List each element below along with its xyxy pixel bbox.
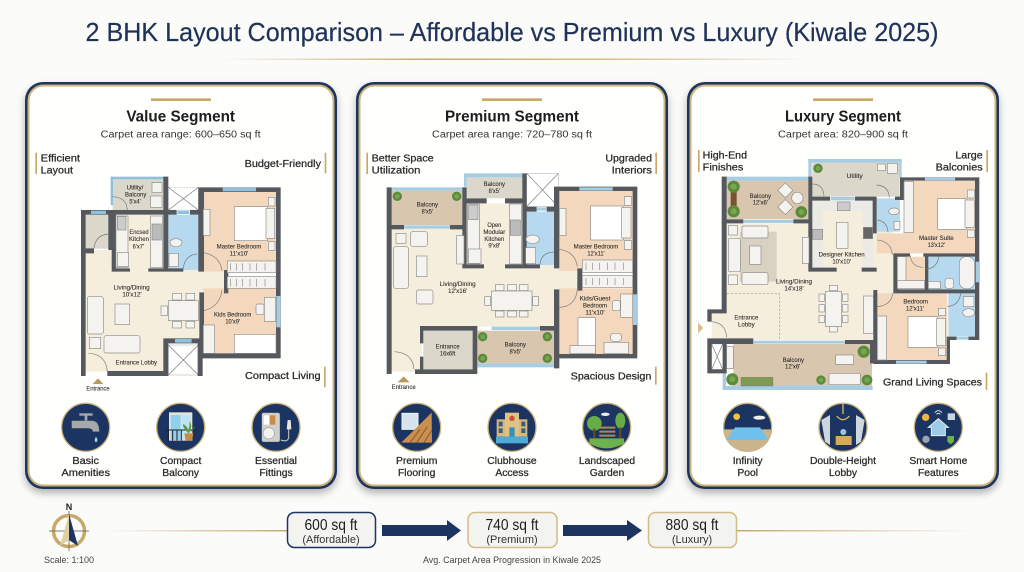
entrance marker: Entrance	[392, 385, 416, 391]
label: infinity pool: Pool	[737, 468, 758, 479]
utility fixtures	[151, 183, 162, 207]
room labels: Living/Dining	[440, 282, 476, 288]
label: large balconies: Large	[955, 151, 983, 162]
room labels: 12'x11'	[906, 307, 924, 313]
room labels: 13'x12'	[928, 243, 945, 249]
room labels: Lobby	[738, 322, 755, 328]
caption: Avg. Carpet Area Progression in Kiwale 2025	[423, 555, 601, 566]
room labels: Bedroom	[903, 300, 928, 306]
room labels: Entrance	[436, 345, 460, 351]
feature icons: luxury	[724, 403, 968, 479]
value box: 880 sq ft: (Luxury)	[672, 534, 712, 546]
label: smart home features: Features	[918, 468, 959, 479]
value box: 600 sq ft: (Affordable)	[302, 534, 360, 546]
label: efficient layout	[35, 153, 80, 177]
room labels: Master Bedroom	[217, 245, 261, 251]
kitchen counters	[813, 202, 873, 248]
room labels: Entrance Lobby	[116, 360, 157, 366]
room labels: Master Suite	[919, 236, 954, 242]
doors	[712, 184, 961, 337]
room labels: 12'x6'	[785, 365, 800, 371]
master suite furniture	[897, 181, 975, 289]
value box: 880 sq ft	[648, 512, 736, 548]
value box: 740 sq ft: (Premium)	[486, 534, 538, 546]
value box: 880 sq ft: 880 sq ft	[666, 517, 719, 534]
room labels: Kitchen	[484, 237, 504, 243]
room labels: Balcony	[484, 182, 505, 188]
label: high-end finishes	[698, 150, 747, 174]
bedroom furniture	[877, 297, 975, 360]
room labels: Bedroom	[583, 303, 607, 309]
label: clubhouse access: Clubhouse	[487, 456, 537, 467]
room labels: 8'x5'	[422, 209, 433, 215]
room labels: 8'x5'	[489, 189, 500, 195]
floor plan: value	[81, 177, 281, 393]
room labels: 16x6ft	[440, 352, 456, 358]
room labels: Kitchen	[129, 237, 149, 243]
master bed	[203, 197, 275, 250]
label: better space utilization: Better Space	[372, 153, 434, 164]
balcony furniture	[727, 163, 897, 385]
room labels: 8'x5'	[510, 349, 521, 355]
label: compact living	[245, 367, 326, 387]
bath fixtures	[526, 235, 539, 264]
living furniture	[394, 232, 539, 317]
feature icons: value	[61, 403, 300, 479]
feature icons: premium	[393, 403, 635, 479]
entrance marker	[86, 378, 110, 393]
label: efficient layout: Efficient	[41, 153, 80, 164]
label: better space utilization: Utilization	[372, 165, 421, 176]
floor plan: luxury	[698, 159, 979, 390]
plants	[726, 164, 872, 386]
label: high-end finishes: High-End	[703, 151, 747, 162]
room labels: Balcony	[417, 203, 438, 209]
label: upgraded interiors: Upgraded	[605, 153, 652, 164]
icon: infinity pool	[724, 403, 772, 451]
carpet area range: Carpet area range: 600–650 sq ft	[101, 129, 261, 140]
room labels: Modular	[483, 230, 505, 236]
icon: clubhouse access	[488, 403, 536, 451]
floor plan: premium	[387, 173, 637, 391]
entrance marker: Entrance	[86, 387, 110, 393]
icon: basic amenities	[62, 403, 110, 451]
label: spacious design: Spacious Design	[571, 372, 652, 383]
room labels: Balcony	[125, 193, 146, 199]
label: landscaped garden: Garden	[590, 468, 624, 479]
label: clubhouse access: Access	[495, 468, 529, 479]
value box: 600 sq ft: 600 sq ft	[304, 517, 358, 534]
room labels: Open	[487, 223, 501, 229]
heading: luxury segment: Luxury Segment	[785, 109, 901, 126]
label: compact balcony: Compact	[160, 456, 201, 467]
bath fixtures	[169, 239, 182, 267]
room labels: Kids/Guest	[580, 296, 611, 302]
label: high-end finishes: Finishes	[703, 163, 743, 174]
doors	[88, 197, 222, 372]
room labels: Utility	[847, 174, 863, 180]
label: upgraded interiors	[605, 153, 657, 176]
label: grand living spaces	[883, 373, 987, 390]
label: better space utilization	[366, 153, 434, 176]
kitchen counters	[468, 204, 521, 264]
label: premium flooring: Flooring	[398, 468, 436, 479]
living furniture	[87, 293, 198, 353]
doors	[394, 249, 577, 369]
room labels: Designer Kitchen	[819, 253, 865, 259]
room labels: 12'x6'	[753, 201, 768, 207]
room labels: 5'x4'	[129, 200, 141, 206]
entrance marker	[392, 376, 416, 391]
plants	[393, 192, 552, 363]
room labels: 11'x10'	[585, 310, 605, 316]
label: large balconies: Balconies	[936, 163, 983, 174]
compass and scale	[44, 502, 94, 565]
icon: double-height lobby	[819, 403, 867, 451]
room labels: Master Bedroom	[574, 244, 618, 250]
label: grand living spaces: Grand Living Spaces	[883, 378, 982, 389]
arrow: affordable to premium	[382, 520, 461, 541]
heading: value segment: Value Segment	[126, 109, 235, 126]
room labels: Utility/	[127, 185, 144, 191]
icon: premium flooring	[393, 403, 441, 451]
room labels: 10'x10'	[832, 260, 851, 266]
room labels: 9'x8'	[488, 244, 500, 250]
room labels: 14'x18'	[784, 286, 804, 292]
wardrobes	[582, 260, 633, 287]
room labels: 6'x7'	[133, 244, 144, 250]
label: infinity pool: Infinity	[733, 456, 763, 467]
icon: compact balcony	[157, 403, 205, 451]
room labels: 12'x16'	[448, 289, 467, 295]
room labels: Living/Dining	[114, 286, 150, 292]
panel: luxury segment	[687, 82, 999, 489]
label: large balconies	[936, 150, 988, 174]
footer lines	[105, 530, 975, 532]
icon: smart home features	[914, 403, 962, 451]
label: landscaped garden: Landscaped	[579, 456, 635, 467]
panel: value segment	[25, 82, 337, 489]
room labels: Balcony	[505, 342, 526, 348]
room labels: 10'x12'	[122, 293, 142, 299]
master bed	[559, 197, 632, 249]
room labels: 11'x10'	[230, 252, 248, 258]
kitchen counters	[116, 216, 163, 268]
room labels	[114, 185, 261, 366]
compass and scale: Scale: 1:100	[44, 555, 94, 565]
value box: 740 sq ft: 740 sq ft	[486, 517, 539, 534]
icon: essential fittings	[252, 403, 300, 451]
kids furniture	[570, 294, 633, 354]
room labels: Kids Bedroom	[214, 312, 251, 318]
label: double-height lobby: Double-Height	[810, 456, 876, 467]
label: budget-friendly: Budget-Friendly	[245, 159, 322, 170]
living furniture	[728, 226, 873, 333]
label: essential fittings: Essential	[255, 456, 297, 467]
label: compact balcony: Balcony	[162, 468, 200, 479]
label: premium flooring: Premium	[396, 456, 437, 467]
label: essential fittings: Fittings	[259, 468, 293, 479]
room labels: 12'x11'	[587, 251, 605, 257]
value box: 600 sq ft	[288, 512, 376, 548]
compass and scale: N	[66, 502, 72, 512]
entrance marker	[698, 323, 703, 333]
label: upgraded interiors: Interiors	[612, 165, 652, 176]
heading: premium segment: Premium Segment	[445, 109, 579, 126]
room labels	[417, 182, 618, 358]
label: compact living: Compact Living	[245, 371, 321, 382]
label: budget-friendly	[245, 153, 326, 173]
label: smart home features: Smart Home	[909, 456, 968, 467]
room labels: Living/Dining	[776, 279, 812, 285]
label: spacious design	[571, 367, 657, 385]
room labels	[734, 174, 954, 371]
bath one fixtures	[889, 208, 900, 229]
label: basic amenities: Amenities	[61, 468, 110, 479]
label: basic amenities: Basic	[72, 456, 99, 467]
room labels: Entrance	[734, 315, 759, 321]
room labels: 10'x9'	[225, 320, 240, 326]
room labels: Encsed	[129, 230, 149, 236]
room labels: Balcony	[750, 194, 771, 200]
icon: landscaped garden	[583, 403, 631, 451]
kids furniture	[203, 297, 276, 353]
panel: premium segment	[356, 82, 668, 489]
carpet area: Carpet area: 820–900 sq ft	[778, 129, 908, 140]
carpet area range: Carpet area range: 720–780 sq ft	[432, 129, 592, 140]
label: double-height lobby: Lobby	[829, 468, 858, 479]
title: 2 BHK Layout Comparison – Affordable vs Premium vs Luxury (Kiwale 2025)	[86, 17, 938, 47]
label: efficient layout: Layout	[41, 166, 73, 177]
room labels: Balcony	[783, 358, 804, 364]
arrow: premium to luxury	[563, 520, 642, 541]
value box: 740 sq ft	[468, 512, 557, 548]
wardrobes	[227, 261, 276, 288]
